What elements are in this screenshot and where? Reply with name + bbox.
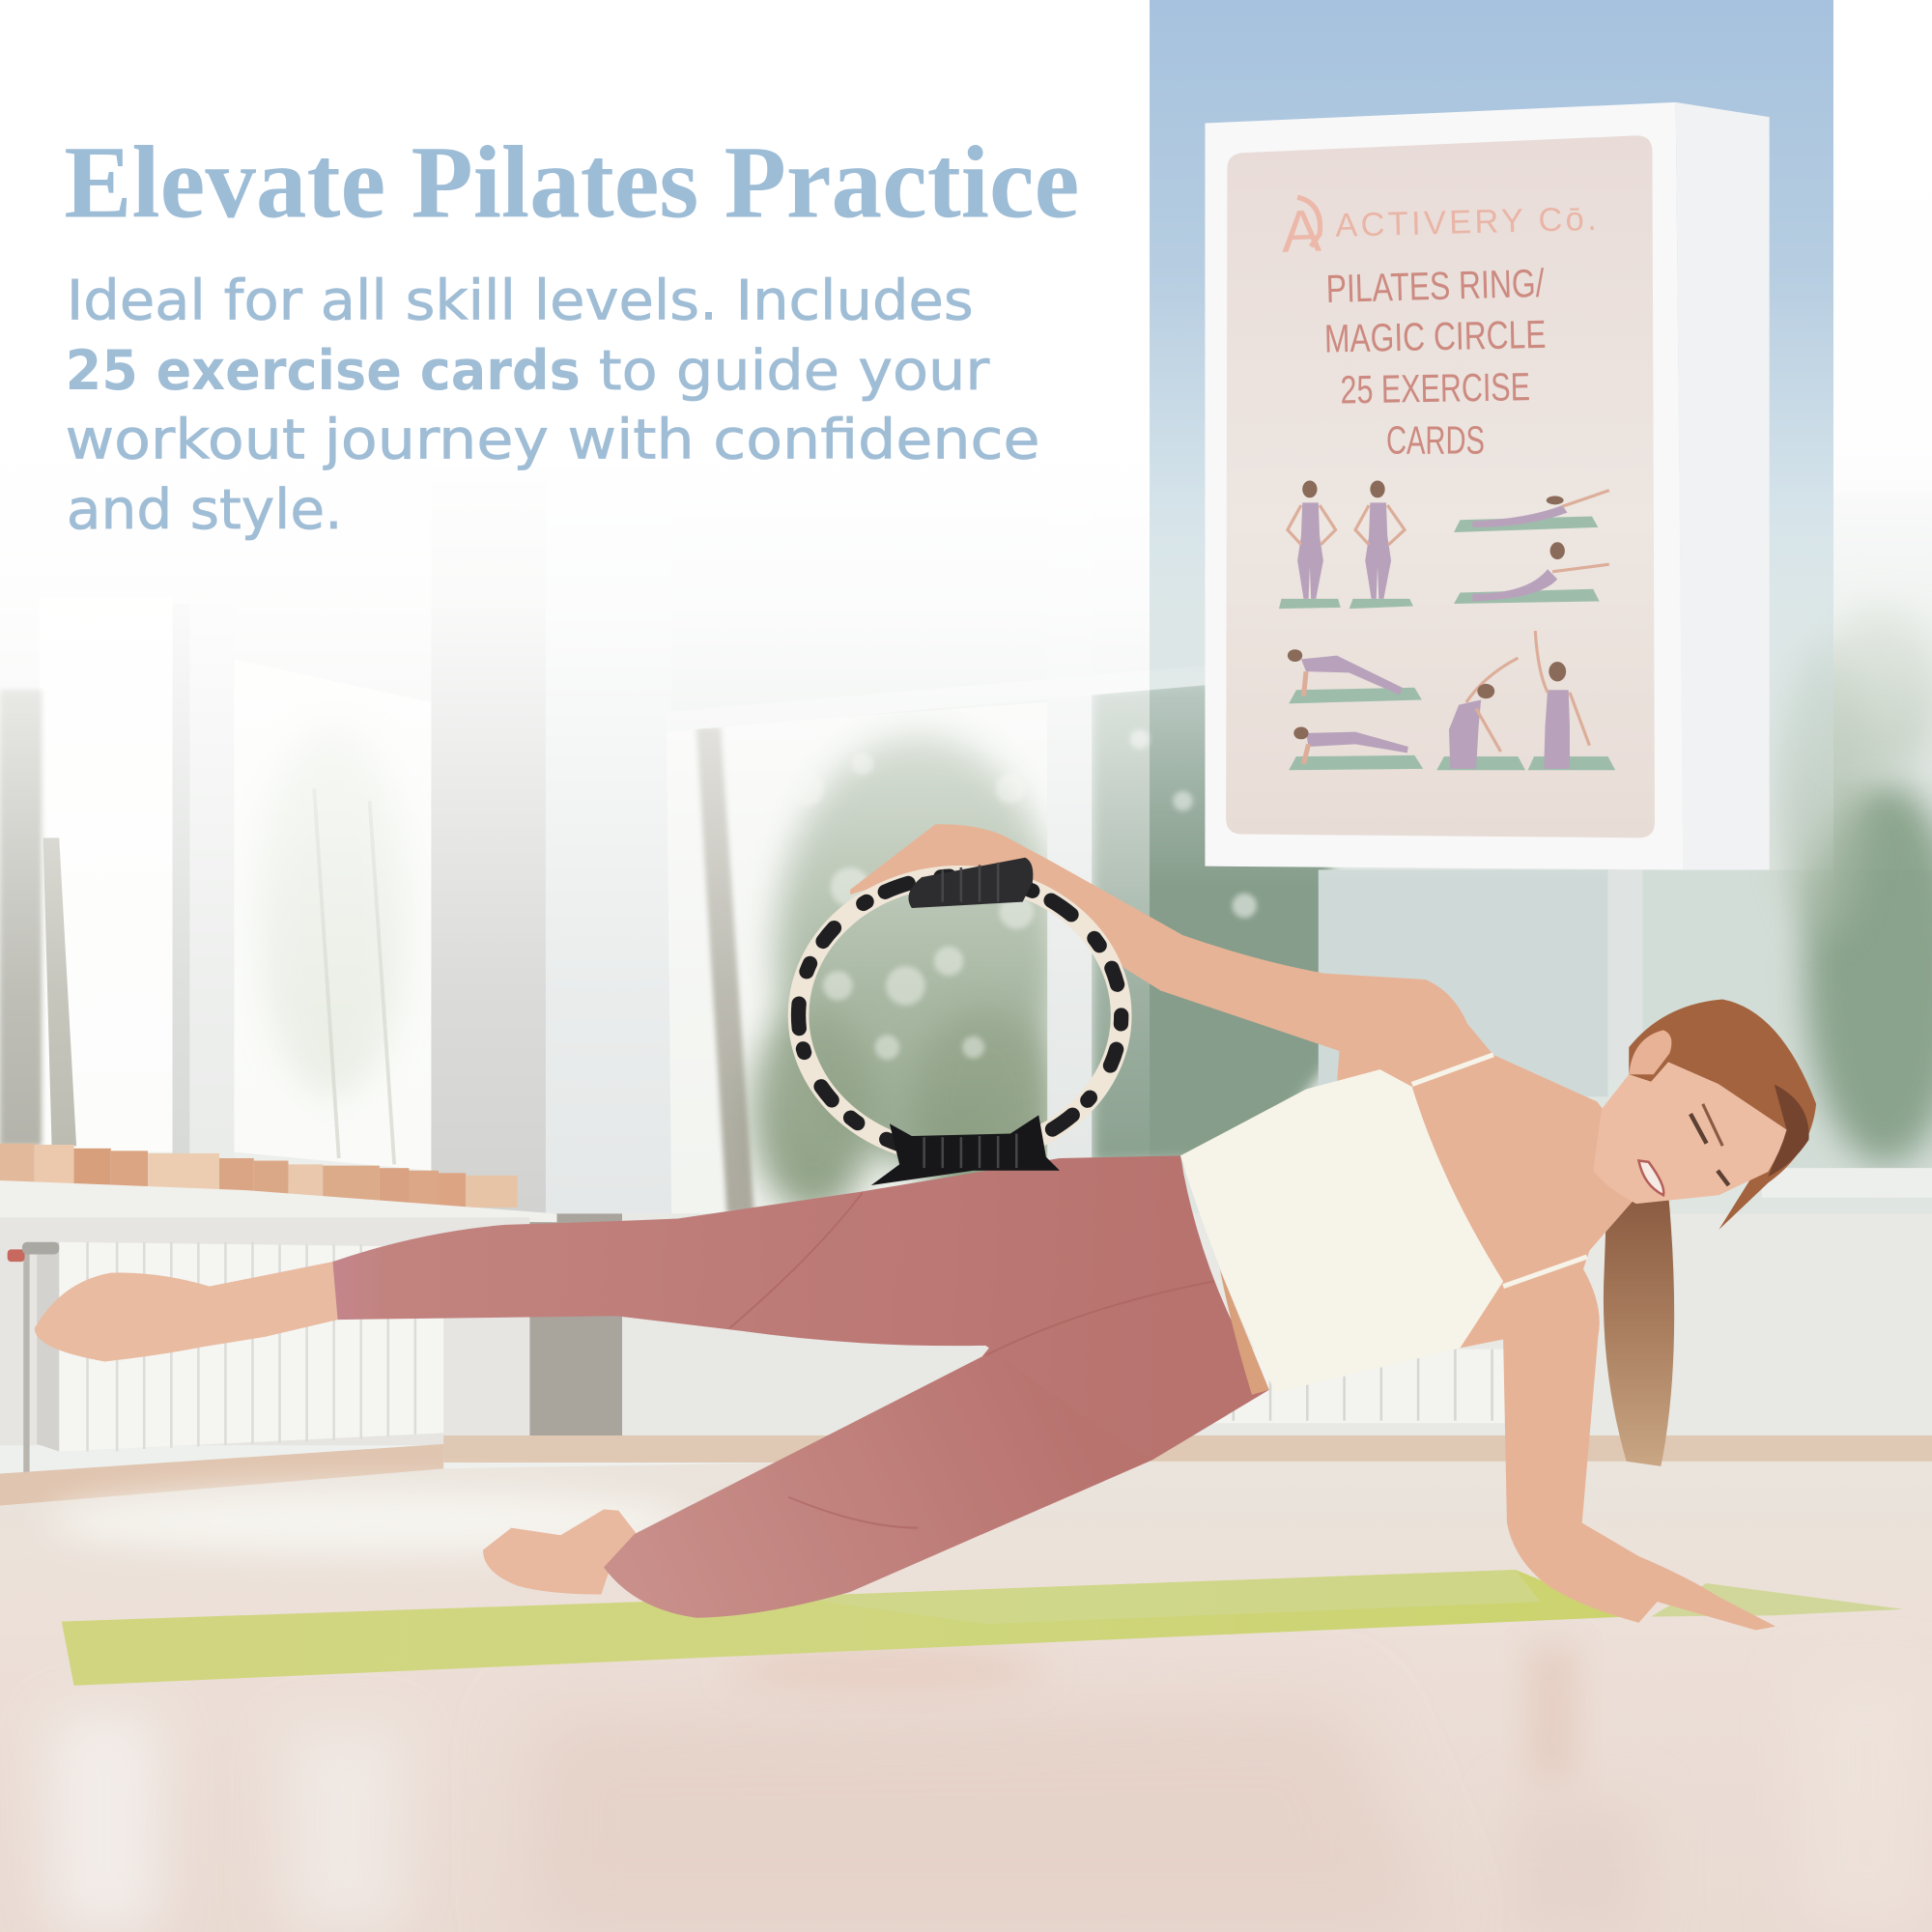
plank figures: [1288, 649, 1423, 770]
body copy: 25 exercise cards: [66, 338, 581, 403]
yoga mat: [62, 1570, 1904, 1686]
handle ribs: [924, 863, 1016, 1168]
blue panel behind product: [1150, 0, 1833, 887]
box title: 25 EXERCISE: [1340, 364, 1530, 412]
body copy: Ideal for all skill levels. Includes: [67, 268, 974, 332]
figures lying prone: [1454, 491, 1609, 604]
box front: [1205, 102, 1683, 870]
waist skin: [1220, 1269, 1269, 1395]
top handle: [908, 858, 1033, 908]
wall and skirting: [0, 1168, 1932, 1506]
box title: MAGIC CIRCLE: [1323, 312, 1547, 361]
radiator left: [8, 1242, 443, 1506]
window ledge with bricks: [0, 1144, 557, 1445]
box side: [1676, 102, 1770, 870]
body copy: to guide your: [599, 338, 990, 403]
eyes: [1690, 1114, 1729, 1185]
hair: [1629, 999, 1816, 1230]
headline: Elevate Pilates Practice: [64, 126, 1079, 240]
exercise illustrations: [1279, 480, 1615, 770]
ear: [1629, 1030, 1671, 1074]
bottom handle: [871, 1115, 1060, 1185]
ponytail: [1604, 1193, 1674, 1466]
white haze on the upper left: [0, 0, 1150, 1208]
body copy: and style.: [67, 477, 343, 542]
window panes left: [0, 579, 431, 1182]
face: [1593, 1062, 1786, 1204]
woman doing side plank with pilates ring: [35, 824, 1816, 1631]
box title: [1323, 261, 1547, 462]
box label: [1226, 135, 1655, 838]
straps: [1412, 1055, 1587, 1287]
brand logo: ACTIVERY Cō.: [1335, 201, 1597, 244]
leggings: [332, 1155, 1269, 1460]
smile: [1638, 1161, 1663, 1195]
box title: PILATES RING/: [1325, 261, 1546, 311]
body copy: workout journey with confidence: [66, 407, 1040, 471]
body copy: [66, 268, 1040, 542]
box title: CARDS: [1386, 417, 1485, 462]
tank top: [1180, 1069, 1503, 1392]
brand logo: [1280, 197, 1597, 265]
figures standing with ring: [1279, 480, 1413, 609]
kneeling side bend figures: [1436, 631, 1615, 770]
floor: [0, 1462, 1932, 1932]
product box: exercise cards: [1205, 102, 1770, 870]
pilates ring: [799, 858, 1122, 1185]
legging seam: [729, 1193, 1213, 1528]
lower leg: [604, 1233, 1233, 1618]
back foot: [483, 1509, 636, 1595]
raised arm, torso and supporting arm: [850, 824, 1776, 1631]
dark hair shading: [1768, 1084, 1809, 1177]
raised foot: [35, 1262, 337, 1361]
pillar: [431, 469, 671, 1438]
window panes right with trees: [666, 493, 1932, 1220]
brand logo: A: [1280, 197, 1322, 265]
eyebrow: [1703, 1104, 1722, 1146]
